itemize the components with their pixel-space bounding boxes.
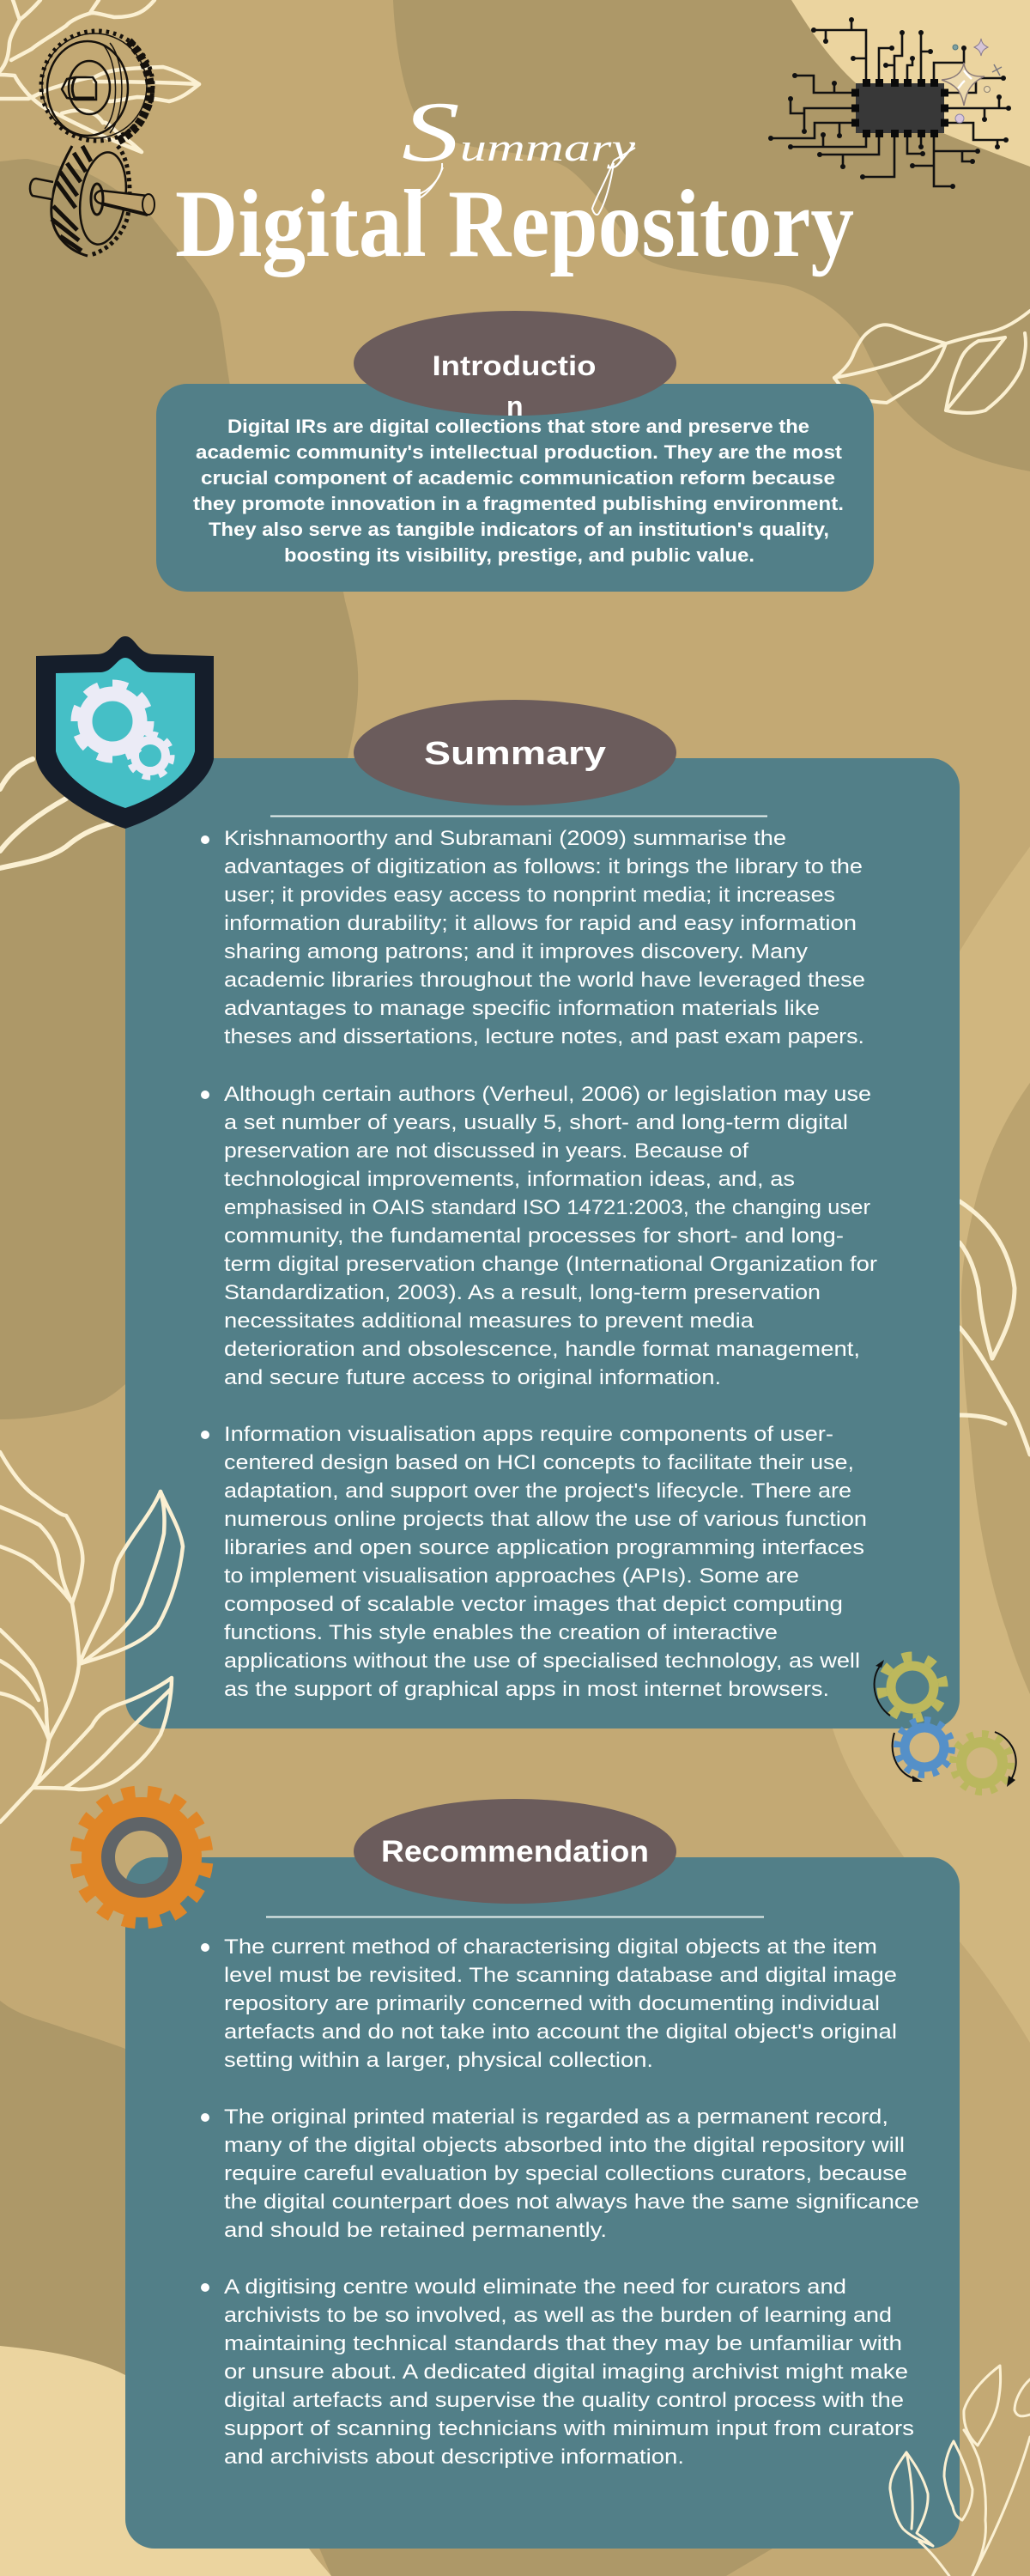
subtitle: Summary — [402, 84, 636, 215]
summary bullet 3: to implement visualisation approaches (APIs). Some are — [224, 1564, 799, 1588]
recommendation bullet 3: A digitising centre would eliminate the need for curators and — [224, 2275, 846, 2299]
summary bullet 1 — [201, 827, 865, 1048]
recommendation bullet 1: level must be revisited. The scanning database and digital image — [224, 1964, 897, 1987]
title: Digital Repository: Digital Repository — [175, 171, 854, 277]
summary bullet 3: applications without the use of specialised technology, as well — [224, 1649, 860, 1673]
panel: introduction card — [156, 384, 874, 592]
bottom-right plant — [890, 2366, 1030, 2576]
summary bullet 3: Information visualisation apps require components of user- — [224, 1423, 833, 1446]
recommendation bullet 1: artefacts and do not take into account the digital object's original — [224, 2020, 897, 2044]
summary bullet 2: a set number of years, usually 5, short- and long-term digital — [224, 1111, 848, 1134]
summary bullet 2: necessitates additional measures to prevent media — [224, 1309, 754, 1333]
introduction text: They also serve as tangible indicators of an institution's quality, — [209, 519, 829, 540]
summary bullet 2: term digital preservation change (International Organization for — [224, 1253, 877, 1276]
summary bullet 3: composed of scalable vector images that depict computing — [224, 1593, 843, 1616]
heading pill: Recommendation: Recommendation — [381, 1835, 649, 1868]
summary bullet 3: adaptation, and support over the project's lifecycle. There are — [224, 1479, 851, 1503]
recommendation bullet 3: or unsure about. A dedicated digital imaging archivist might make — [224, 2360, 908, 2384]
summary bullet 2: community, the fundamental processes for short- and long- — [224, 1224, 844, 1248]
recommendation bullet 2: require careful evaluation by special collections curators, because — [224, 2162, 907, 2185]
introduction text: academic community's intellectual production. They are the most — [196, 441, 843, 463]
summary bullet 2: Standardization, 2003). As a result, long-term preservation — [224, 1281, 821, 1304]
panel: recommendation card — [125, 1857, 960, 2549]
introduction text — [193, 416, 844, 566]
left branch behind shield — [0, 759, 115, 868]
summary bullet 1: information durability; it allows for rapid and easy information — [224, 912, 857, 935]
heading pill: Introduction — [354, 311, 676, 422]
recommendation bullet 2 — [201, 2105, 919, 2242]
heading pill: Introduction: n — [506, 391, 524, 422]
introduction text: boosting its visibility, prestige, and public value. — [284, 544, 754, 566]
summary bullet 1: sharing among patrons; and it improves discovery. Many — [224, 940, 808, 963]
summary bullet 3: libraries and open source application programming interfaces — [224, 1536, 864, 1559]
introduction text: they promote innovation in a fragmented publishing environment. — [193, 493, 844, 514]
summary bullet 2: emphasised in OAIS standard ISO 14721:2003, the changing user — [224, 1196, 870, 1219]
recommendation bullet 2: and should be retained permanently. — [224, 2219, 607, 2242]
heading pill: Summary: Summary — [424, 736, 606, 772]
summary bullet 2: preservation are not discussed in years. Because of — [224, 1139, 748, 1163]
recommendation bullet 3: archivists to be so involved, as well as the burden of learning and — [224, 2304, 892, 2327]
recommendation bullet 3: and archivists about descriptive information. — [224, 2445, 684, 2469]
recommendation bullet 2: the digital counterpart does not always have the same significance — [224, 2190, 919, 2214]
summary bullet 2: Although certain authors (Verheul, 2006) or legislation may use — [224, 1083, 871, 1106]
recommendation bullet 3: support of scanning technicians with minimum input from curators — [224, 2417, 914, 2440]
icon: shield with gears — [36, 636, 214, 829]
summary bullet 3: numerous online projects that allow the use of various function — [224, 1508, 867, 1531]
recommendation bullet 1 — [201, 1935, 897, 2072]
left plant — [0, 1452, 183, 1822]
top-right leaf branch — [834, 311, 1030, 413]
recommendation bullet 2: many of the digital objects absorbed into the digital repository will — [224, 2134, 905, 2157]
recommendation bullet 1: repository are primarily concerned with documenting individual — [224, 1992, 880, 2015]
heading pill: Summary — [354, 700, 676, 805]
summary bullet 2 — [201, 1083, 877, 1389]
summary bullet 1: advantages to manage specific information materials like — [224, 997, 820, 1020]
summary bullet 1: user; it provides easy access to nonprint media; it increases — [224, 884, 835, 907]
summary bullet 1: theses and dissertations, lecture notes, and past exam papers. — [224, 1025, 864, 1048]
summary bullet 3 — [201, 1423, 867, 1701]
introduction text: crucial component of academic communication reform because — [201, 467, 835, 489]
recommendation bullet 1: The current method of characterising digital objects at the item — [224, 1935, 877, 1959]
recommendation bullet 3: maintaining technical standards that they may be unfamiliar with — [224, 2332, 902, 2355]
heading pill: Introduction: Introductio — [433, 350, 596, 381]
recommendation bullet 1: setting within a larger, physical collection. — [224, 2049, 653, 2072]
summary bullet 1: Krishnamoorthy and Subramani (2009) summarise the — [224, 827, 786, 850]
summary bullet 1: advantages of digitization as follows: it brings the library to the — [224, 855, 863, 878]
summary bullet 2: technological improvements, information ideas, and, as — [224, 1168, 795, 1191]
heading pill: Recommendation — [354, 1799, 676, 1904]
icon: circuit chip — [768, 17, 1011, 189]
panel: summary card — [125, 758, 960, 1728]
subtitle: Summary: S ummary — [402, 84, 636, 179]
summary bullet 3: functions. This style enables the creation of interactive — [224, 1621, 778, 1644]
summary bullet 2: deterioration and obsolescence, handle format management, — [224, 1338, 860, 1361]
summary bullet 3: centered design based on HCI concepts to facilitate their use, — [224, 1451, 854, 1474]
icon: small rotating gears — [871, 1646, 1016, 1792]
icon: meshing engraved gears — [30, 31, 154, 256]
top-left leaf branch — [0, 0, 199, 152]
summary bullet 2: and secure future access to original information. — [224, 1366, 721, 1389]
recommendation bullet 3: digital artefacts and supervise the quality control process with the — [224, 2389, 904, 2412]
introduction text: Digital IRs are digital collections that store and preserve the — [227, 416, 809, 437]
summary bullet 1: academic libraries throughout the world have leveraged these — [224, 969, 865, 992]
recommendation bullet 3 — [201, 2275, 914, 2469]
recommendation bullet 2: The original printed material is regarded as a permanent record, — [224, 2105, 888, 2129]
summary bullet 3: as the support of graphical apps in most internet browsers. — [224, 1678, 829, 1701]
icon: orange gear — [71, 1787, 212, 1928]
right branch behind card — [960, 1201, 1030, 1455]
